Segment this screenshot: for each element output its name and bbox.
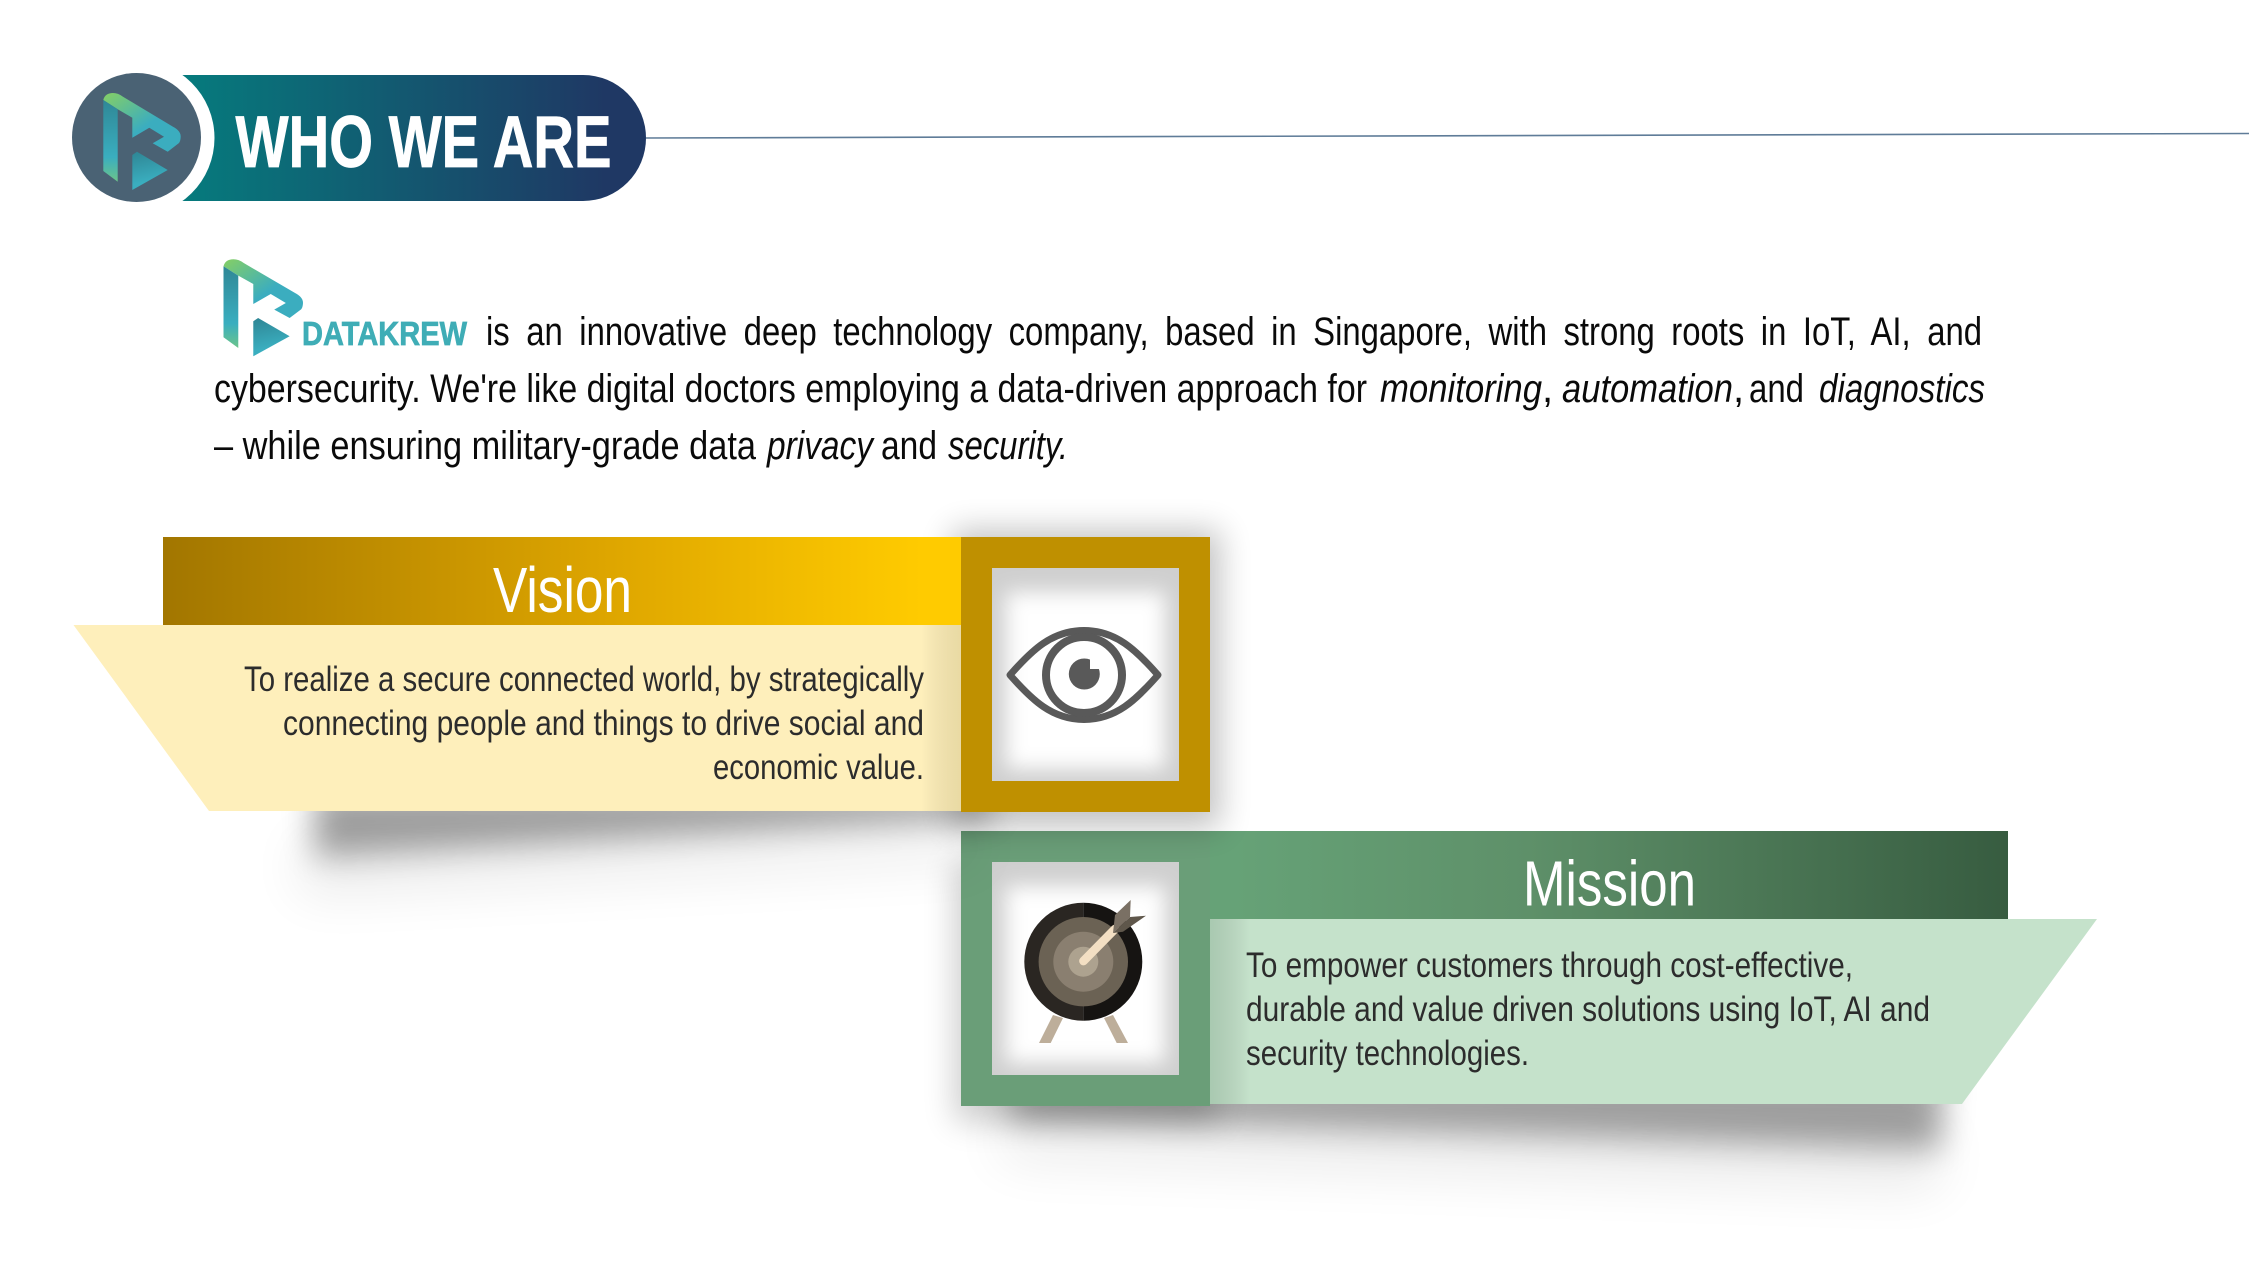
vision frame glow shadow <box>952 530 1220 828</box>
icon: target with arrow <box>1024 900 1146 1043</box>
vision heading: Vision <box>493 554 632 626</box>
vision body text: connecting people and things to drive social and <box>283 704 924 743</box>
paragraph text: security. <box>948 424 1068 468</box>
paragraph text: and <box>881 424 937 468</box>
banner white ring <box>58 60 214 216</box>
mission body text <box>1246 946 1930 1073</box>
inline Datakrew logo: DATAKREW <box>302 315 468 352</box>
mission body text: security technologies. <box>1246 1034 1529 1073</box>
icon: eye <box>1010 630 1158 720</box>
inline Datakrew logo <box>224 259 468 356</box>
paragraph text <box>214 310 1985 468</box>
vision icon frame <box>961 537 1210 812</box>
paragraph text: privacy <box>766 424 876 468</box>
mission header bar <box>1210 831 2008 919</box>
paragraph text: cybersecurity. We're like digital doctors employing a data-driven approach for <box>214 367 1367 411</box>
paragraph text: automation <box>1562 367 1733 411</box>
mission heading: Mission <box>1523 848 1696 920</box>
mission body text: To empower customers through cost-effective, <box>1246 946 1853 985</box>
mission body panel <box>1210 919 2097 1104</box>
paragraph text: – while ensuring military-grade data <box>214 424 757 468</box>
mission drop shadow <box>955 860 1945 1190</box>
mission icon frame <box>961 831 1210 1106</box>
paragraph text: and <box>1749 367 1804 411</box>
mission body text: durable and value driven solutions using IoT, AI and <box>1246 990 1930 1029</box>
header banner <box>58 60 646 216</box>
paragraph text: monitoring <box>1380 367 1542 411</box>
panel: mission <box>955 831 2097 1190</box>
paragraph text: diagnostics <box>1819 367 1985 411</box>
banner title: WHO WE ARE <box>236 102 612 183</box>
vision body text: economic value. <box>713 748 924 787</box>
paragraph text: , <box>1733 367 1744 411</box>
banner round logo badge <box>72 73 201 202</box>
vision drop shadow <box>300 790 990 895</box>
intro paragraph with logo <box>214 259 1985 468</box>
vision body text <box>244 660 924 787</box>
panel: vision <box>74 530 1220 895</box>
paragraph text: , <box>1542 367 1553 411</box>
banner pill <box>150 75 646 201</box>
vision body text: To realize a secure connected world, by strategically <box>244 660 924 699</box>
vision header bar <box>163 537 961 625</box>
vision body panel <box>74 625 961 811</box>
header rule line <box>646 134 2249 138</box>
